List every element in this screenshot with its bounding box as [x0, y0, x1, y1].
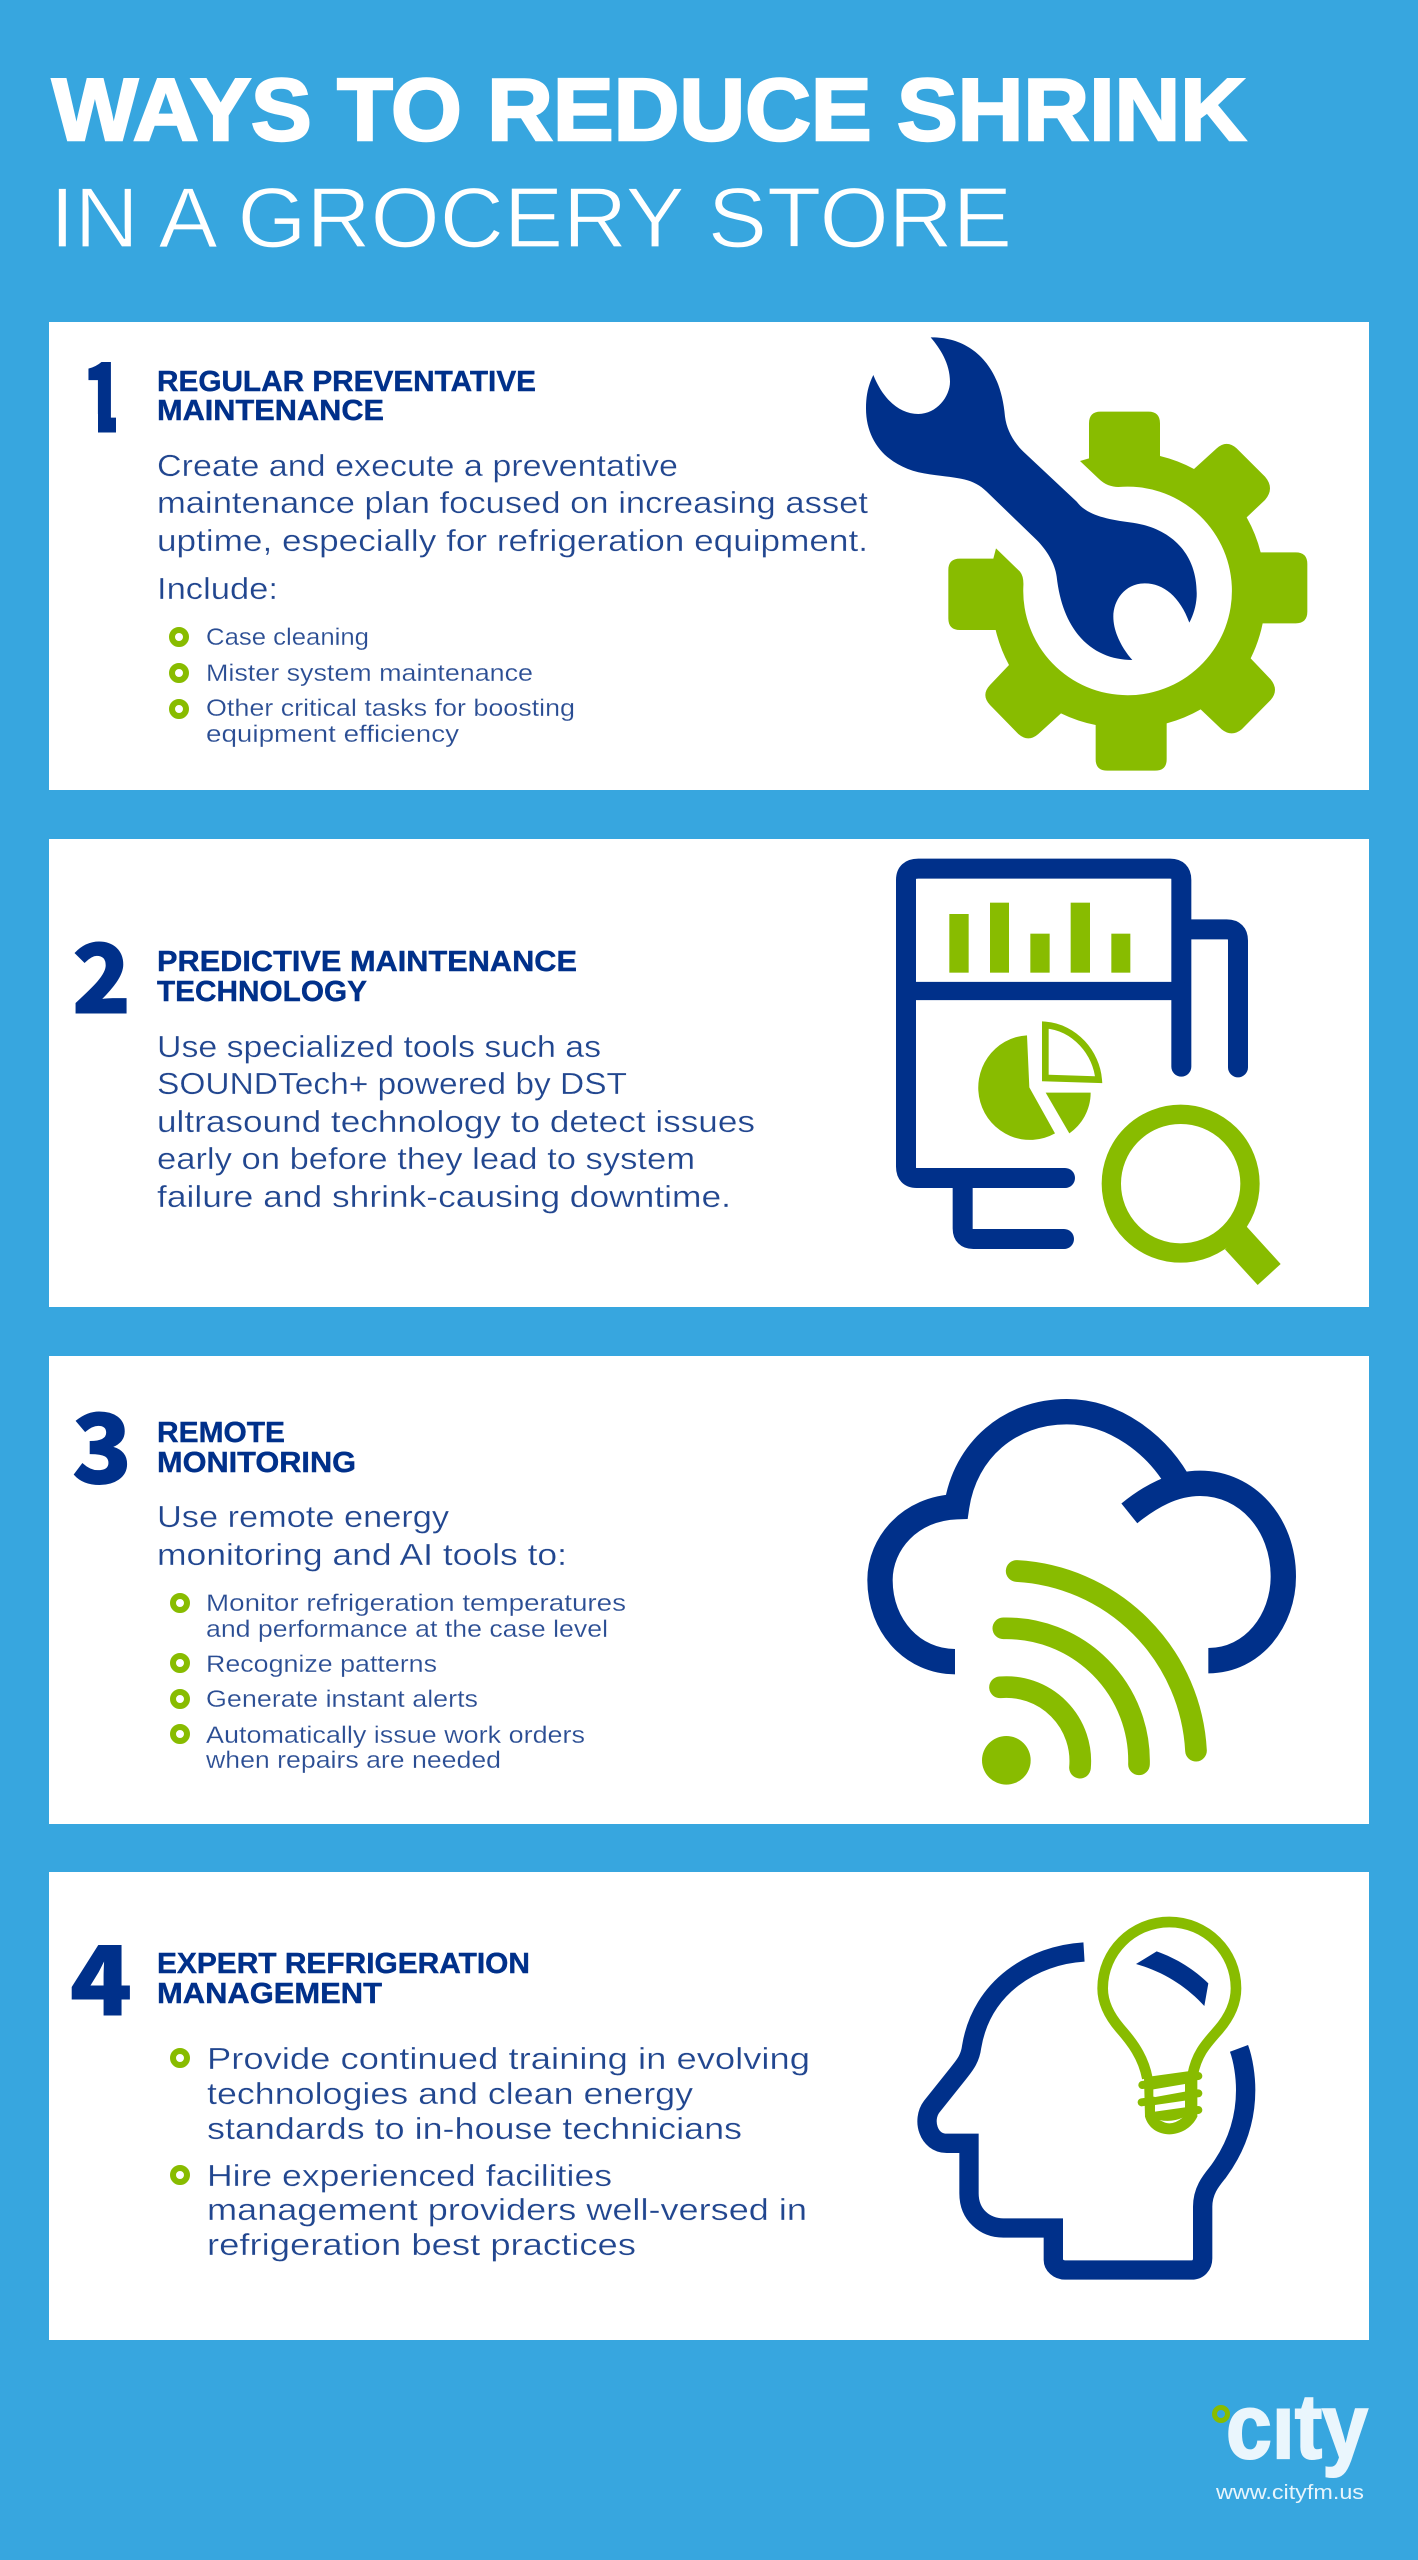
bullet list: monitoring capabilities: when repairs are needed — [205, 1747, 501, 1774]
text block: predictive tools description — [157, 1029, 755, 1214]
logo: city: city — [1226, 2376, 1368, 2478]
bullet list: included tasks: Mister system maintenance — [206, 660, 533, 687]
bullet list: monitoring capabilities: Automatically issue work orders — [206, 1722, 585, 1749]
heading: remote monitoring: MONITORING — [157, 1447, 356, 1479]
bullet list: included tasks: equipment efficiency — [206, 721, 459, 748]
icon: cloud with wifi signal — [880, 1412, 1283, 1785]
text block: maintenance plan description — [157, 448, 868, 606]
number 2: 2 — [72, 902, 131, 1041]
bullet list: training and hiring: Provide continued training in evolving — [207, 2041, 810, 2076]
text block: predictive tools description: ultrasound technology to detect issues — [157, 1104, 755, 1139]
text block: remote monitoring intro — [157, 1499, 567, 1572]
text block: maintenance plan description: uptime, especially for refrigeration equipment. — [157, 523, 868, 558]
heading: expert refrigeration management: MANAGEMENT — [157, 1978, 382, 2010]
text block: maintenance plan description: maintenance plan focused on increasing asset — [157, 485, 868, 520]
heading: regular preventative maintenance: MAINTENANCE — [157, 395, 384, 427]
panel: remote monitoring — [49, 1356, 1369, 1824]
bullet list: monitoring capabilities: Recognize patterns — [206, 1651, 437, 1678]
logo: city — [1214, 2376, 1368, 2504]
title — [50, 60, 1246, 266]
heading: predictive maintenance technology — [157, 946, 577, 1008]
heading: remote monitoring — [157, 1417, 356, 1479]
text block: remote monitoring intro: Use remote energy — [157, 1499, 450, 1534]
bullet list: training and hiring: refrigeration best practices — [207, 2227, 636, 2262]
text block: maintenance plan description: Create and execute a preventative — [157, 448, 678, 483]
heading: expert refrigeration management — [157, 1948, 530, 2010]
text block: predictive tools description: failure and shrink-causing downtime. — [157, 1179, 731, 1214]
bullet list: training and hiring: Hire experienced facilities — [207, 2158, 612, 2193]
heading: predictive maintenance technology: TECHNOLOGY — [157, 976, 367, 1008]
heading: regular preventative maintenance — [157, 366, 536, 427]
title: IN A GROCERY STORE — [50, 171, 1012, 266]
panel: predictive maintenance technology — [49, 839, 1369, 1307]
panel: expert refrigeration management — [49, 1872, 1369, 2340]
bullet list: monitoring capabilities: Monitor refrigeration temperatures — [206, 1590, 626, 1617]
text block: predictive tools description: Use specialized tools such as — [157, 1029, 601, 1064]
bullet list: training and hiring: technologies and clean energy — [207, 2076, 694, 2111]
text block: remote monitoring intro: monitoring and AI tools to: — [157, 1537, 567, 1572]
heading: remote monitoring: REMOTE — [157, 1417, 285, 1449]
bullet list: monitoring capabilities: and performance at the case level — [206, 1616, 608, 1643]
heading: regular preventative maintenance: REGULAR PREVENTATIVE — [157, 366, 536, 398]
icon: wrench and gear — [866, 337, 1307, 771]
bullet list: included tasks: Other critical tasks for boosting — [206, 695, 575, 722]
heading: expert refrigeration management: EXPERT REFRIGERATION — [157, 1948, 530, 1980]
icon: monitor with charts and magnifier — [906, 869, 1281, 1285]
bullet list: monitoring capabilities: Generate instant alerts — [206, 1686, 478, 1713]
bullet list: included tasks — [172, 624, 575, 748]
bullet list: monitoring capabilities — [173, 1590, 626, 1774]
number 1: 1 — [82, 321, 124, 460]
heading: predictive maintenance technology: PREDICTIVE MAINTENANCE — [157, 946, 577, 978]
bullet list: training and hiring: standards to in-house technicians — [207, 2111, 742, 2146]
number 3: 3 — [72, 1372, 132, 1511]
title: WAYS TO REDUCE SHRINK — [52, 60, 1246, 159]
icon: head with light bulb — [927, 1922, 1246, 2270]
text block: maintenance plan description: Include: — [157, 571, 278, 606]
bullet list: training and hiring: management providers well-versed in — [207, 2192, 807, 2227]
text block: predictive tools description: SOUNDTech+ powered by DST — [157, 1066, 627, 1101]
text block: predictive tools description: early on before they lead to system — [157, 1141, 695, 1176]
bullet list: included tasks: Case cleaning — [206, 624, 369, 651]
panel: regular preventative maintenance — [49, 321, 1369, 790]
website url: www.cityfm.us — [1215, 2482, 1364, 2504]
bullet list: training and hiring — [173, 2041, 810, 2262]
number 4: 4 — [70, 1904, 132, 2043]
